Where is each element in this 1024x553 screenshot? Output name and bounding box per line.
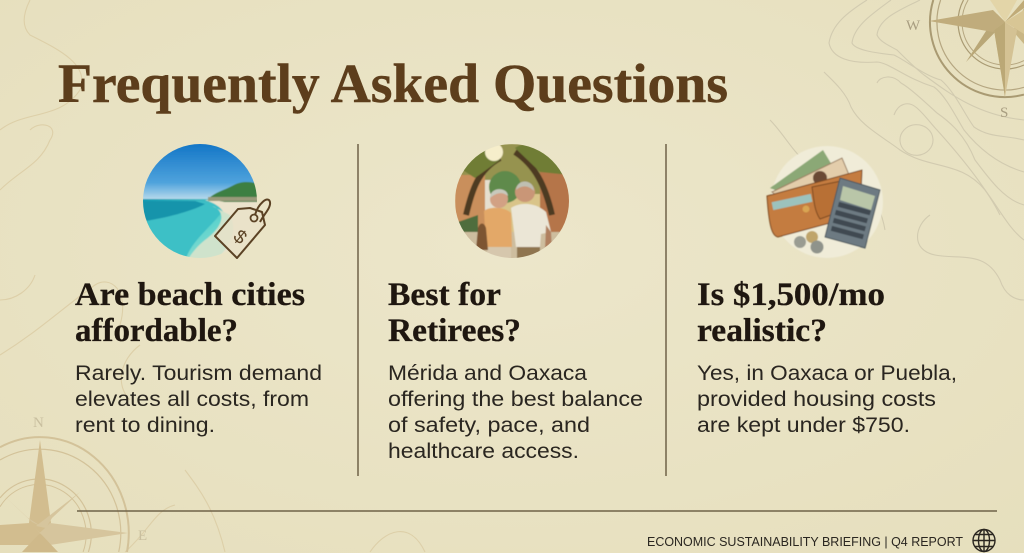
icon: wallet and calculator — [767, 146, 883, 258]
body text: Mérida and Oaxaca — [388, 361, 587, 385]
title: Frequently Asked Questions — [58, 53, 728, 114]
heading: Retirees? — [388, 313, 521, 349]
body text: provided housing costs — [697, 387, 936, 411]
body text: elevates all costs, from — [75, 387, 309, 411]
heading: realistic? — [697, 313, 827, 349]
icon: retired couple photo — [455, 143, 570, 260]
panel: budget — [697, 146, 957, 437]
footer rule — [77, 510, 997, 512]
heading: Are beach cities — [75, 277, 305, 313]
body text: Rarely. Tourism demand — [75, 361, 322, 385]
heading: affordable? — [75, 313, 238, 349]
compass west letter: W — [906, 18, 921, 34]
body text: of safety, pace, and — [388, 413, 590, 437]
body text: healthcare access. — [388, 439, 579, 463]
panel: beach cities — [75, 142, 322, 437]
footer text: ECONOMIC SUSTAINABILITY BRIEFING | Q4 REPORT — [647, 534, 963, 549]
icon: beach photo with price tag: $ — [229, 226, 251, 249]
panel: retirees — [388, 143, 643, 463]
compass rose: bottom left — [0, 437, 129, 552]
heading — [388, 277, 521, 349]
body text — [697, 361, 957, 437]
body text: Yes, in Oaxaca or Puebla, — [697, 361, 957, 385]
compass south letter: S — [1000, 105, 1008, 121]
heading — [697, 277, 885, 349]
body text: are kept under $750. — [697, 413, 910, 437]
compass rose: top right — [929, 0, 1024, 97]
body text: rent to dining. — [75, 413, 215, 437]
icon: globe — [973, 530, 995, 552]
body text: offering the best balance — [388, 387, 643, 411]
body text — [388, 361, 643, 463]
icon: beach photo with price tag — [140, 142, 270, 262]
map contour lines — [770, 0, 1024, 300]
body text — [75, 361, 322, 437]
compass north letter: N — [33, 415, 44, 431]
column dividers — [358, 144, 666, 476]
heading: Is $1,500/mo — [697, 277, 885, 313]
compass east letter: E — [138, 528, 147, 544]
heading — [75, 277, 305, 349]
heading: Best for — [388, 277, 501, 313]
